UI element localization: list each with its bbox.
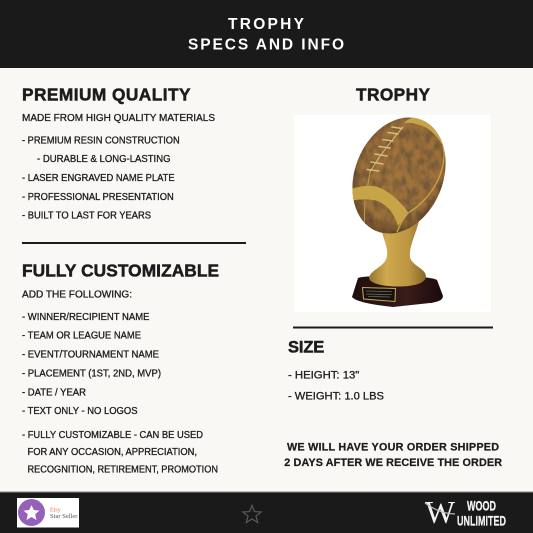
etsy star seller badge: Star Seller	[50, 514, 78, 520]
heading: premium quality: PREMIUM QUALITY	[22, 85, 191, 105]
trophy stem	[369, 221, 426, 286]
shipping note: WE WILL HAVE YOUR ORDER SHIPPED	[287, 442, 499, 454]
customization option list: - TEAM OR LEAGUE NAME	[22, 331, 142, 342]
wood unlimited logo: WOOD	[467, 498, 496, 514]
weight spec: - WEIGHT: 1.0 LBS	[288, 390, 384, 402]
customization note: FOR ANY OCCASION, APPRECIATION,	[28, 447, 197, 458]
header banner: SPECS AND INFO	[188, 36, 344, 54]
customization intro text: ADD THE FOLLOWING:	[22, 290, 132, 301]
customization option list: - WINNER/RECIPIENT NAME	[22, 312, 150, 323]
quality feature list: - LASER ENGRAVED NAME PLATE	[22, 173, 175, 184]
customization note	[22, 430, 218, 476]
quality feature list: - BUILT TO LAST FOR YEARS	[22, 211, 152, 222]
quality intro text: MADE FROM HIGH QUALITY MATERIALS	[22, 113, 215, 124]
panel: premium quality	[22, 85, 215, 222]
heading: fully customizable: FULLY CUSTOMIZABLE	[22, 261, 219, 281]
customization option list: - DATE / YEAR	[22, 387, 86, 398]
height spec: - HEIGHT: 13"	[288, 370, 359, 382]
quality feature list: - PREMIUM RESIN CONSTRUCTION	[22, 135, 180, 146]
panel: size	[288, 339, 384, 402]
gold band	[350, 186, 408, 226]
trophy image	[294, 103, 491, 312]
footer bar	[0, 492, 533, 533]
header banner	[0, 0, 533, 68]
heading: size: SIZE	[288, 339, 324, 357]
shipping note	[284, 442, 502, 469]
quality feature list: - PROFESSIONAL PRESENTATION	[22, 192, 174, 203]
customization option list: - PLACEMENT (1ST, 2ND, MVP)	[22, 369, 161, 380]
quality feature list	[22, 135, 180, 222]
header banner: TROPHY	[228, 16, 305, 33]
etsy star seller badge	[17, 498, 79, 528]
football	[352, 118, 446, 234]
gold seam	[397, 146, 444, 232]
customization option list: - TEXT ONLY - NO LOGOS	[22, 406, 138, 417]
laces	[364, 127, 403, 228]
trophy base	[352, 276, 443, 307]
customization option list: - EVENT/TOURNAMENT NAME	[22, 350, 160, 361]
icon: outlined star	[243, 506, 261, 522]
wood unlimited logo	[425, 494, 506, 530]
wood unlimited logo: W	[425, 494, 456, 530]
heading: trophy: TROPHY	[356, 85, 430, 105]
panel: fully customizable	[22, 261, 219, 476]
customization note: RECOGNITION, RETIREMENT, PROMOTION	[28, 464, 218, 476]
etsy star seller badge: Etsy	[50, 508, 61, 514]
customization option list	[22, 312, 161, 417]
wood unlimited logo: UNLIMITED	[457, 514, 506, 528]
quality feature list: - DURABLE & LONG-LASTING	[37, 154, 170, 165]
customization note: - FULLY CUSTOMIZABLE - CAN BE USED	[22, 430, 203, 441]
shipping note: 2 DAYS AFTER WE RECEIVE THE ORDER	[284, 457, 502, 469]
gold top cap	[404, 118, 444, 148]
